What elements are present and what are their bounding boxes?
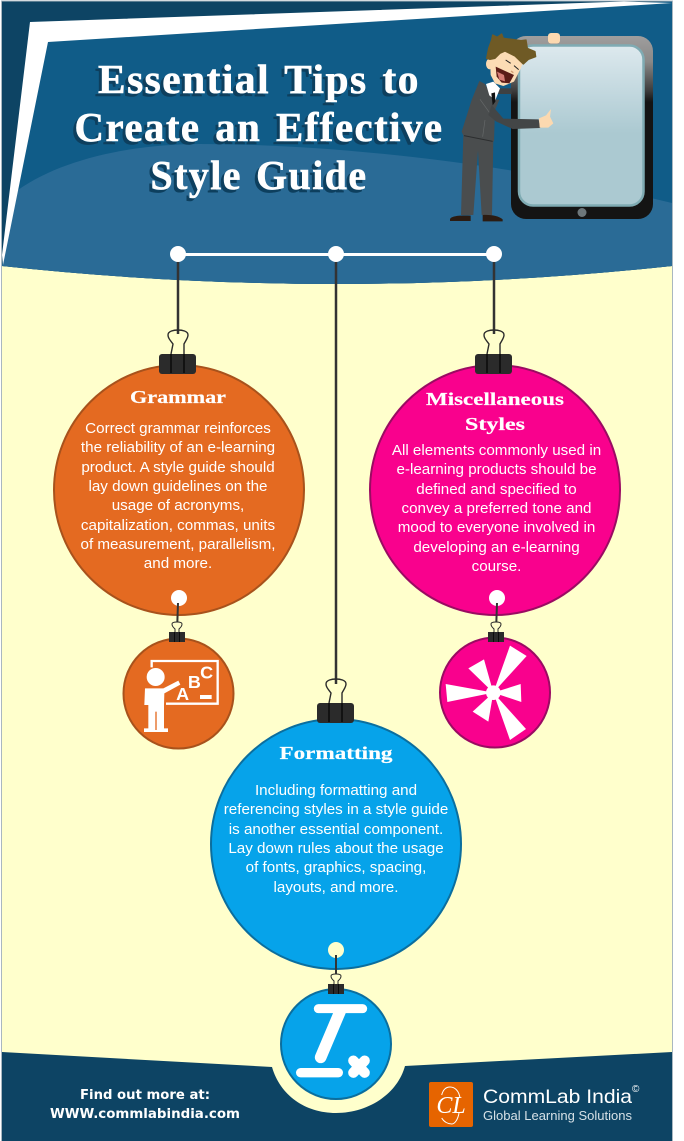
panel: Miscellaneous Styles bbox=[370, 330, 620, 615]
icon: teacher at board: C bbox=[200, 663, 213, 683]
icon: clear formatting bbox=[301, 1009, 365, 1073]
body text: and more. bbox=[144, 555, 212, 572]
logo: © bbox=[632, 1084, 640, 1095]
title: Style Guide bbox=[150, 152, 368, 198]
body text: convey a preferred tone and bbox=[402, 500, 591, 517]
heading: Miscellaneous Styles: Styles bbox=[465, 414, 525, 434]
panel: Formatting bbox=[211, 679, 461, 969]
body text: course. bbox=[472, 558, 521, 575]
body text: referencing styles in a style guide bbox=[224, 801, 448, 818]
heading: Formatting: Formatting bbox=[280, 743, 392, 763]
footer link text: WWW.commlabindia.com bbox=[50, 1107, 240, 1122]
panel: header banner bbox=[2, 2, 672, 284]
body text bbox=[81, 420, 275, 572]
icon: asterisk bbox=[446, 646, 527, 740]
clip bbox=[317, 679, 354, 723]
body text: mood to everyone involved in bbox=[398, 519, 595, 536]
tablet bbox=[511, 33, 653, 219]
body text: of fonts, graphics, spacing, bbox=[246, 859, 426, 876]
panel: Grammar icon bbox=[124, 603, 234, 748]
body text bbox=[392, 442, 601, 575]
body text: usage of acronyms, bbox=[112, 497, 244, 514]
logo: Global Learning Solutions bbox=[483, 1108, 632, 1123]
body text: is another essential component. bbox=[229, 821, 443, 838]
body text: Including formatting and bbox=[255, 782, 417, 799]
footer link text: Find out more at: bbox=[80, 1088, 210, 1103]
hanger connector bar bbox=[170, 246, 502, 684]
body text: developing an e-learning bbox=[413, 539, 580, 556]
heading: Miscellaneous Styles bbox=[426, 389, 564, 434]
body text: defined and specified to bbox=[416, 481, 577, 498]
character: businessman bbox=[450, 34, 553, 221]
clip bbox=[475, 330, 512, 374]
body text: All elements commonly used in bbox=[392, 442, 601, 459]
title: Essential Tips to bbox=[98, 56, 420, 102]
icon: teacher at board: B bbox=[188, 672, 201, 692]
panel: footer bbox=[2, 1052, 672, 1141]
body text: capitalization, commas, units bbox=[81, 517, 275, 534]
icon: teacher at board bbox=[144, 661, 218, 732]
body text: Correct grammar reinforces bbox=[85, 420, 271, 437]
clip bbox=[159, 330, 196, 374]
body text: product. A style guide should bbox=[81, 459, 275, 476]
footer link text bbox=[50, 1088, 240, 1122]
icon: teacher at board: A bbox=[176, 684, 189, 704]
body text: lay down guidelines on the bbox=[88, 478, 268, 495]
logo: CL bbox=[436, 1093, 466, 1119]
logo bbox=[429, 1082, 640, 1127]
body text bbox=[224, 782, 448, 896]
white frame bbox=[2, 2, 672, 265]
body text: e-learning products should be bbox=[396, 461, 597, 478]
panel: Grammar bbox=[54, 330, 304, 615]
body text: of measurement, parallelism, bbox=[81, 536, 275, 553]
heading: Miscellaneous Styles: Miscellaneous bbox=[426, 389, 564, 409]
body text: Lay down rules about the usage bbox=[228, 840, 444, 857]
title bbox=[74, 56, 444, 198]
body text: the reliability of an e-learning bbox=[81, 439, 275, 456]
body text: layouts, and more. bbox=[274, 879, 398, 896]
panel: Formatting icon bbox=[281, 955, 391, 1099]
panel: Miscellaneous icon bbox=[440, 603, 550, 748]
logo: CommLab India bbox=[483, 1086, 632, 1108]
heading: Grammar: Grammar bbox=[130, 387, 226, 407]
title: Create an Effective bbox=[74, 104, 444, 150]
